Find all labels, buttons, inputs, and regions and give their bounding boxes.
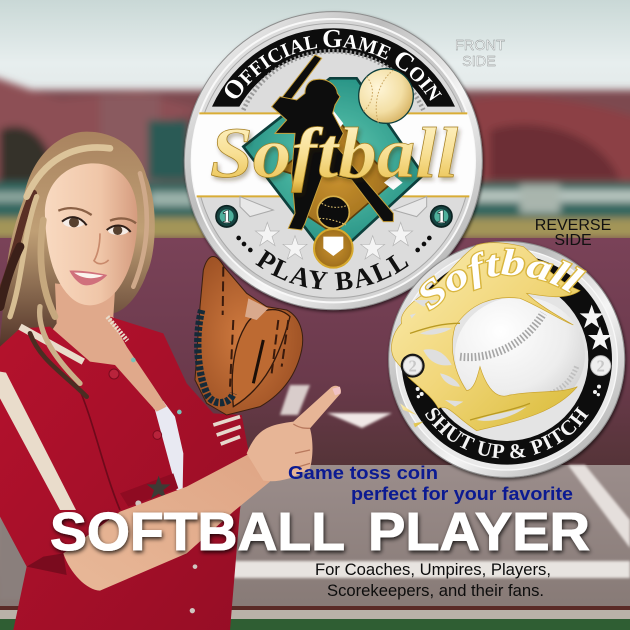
inner silver field [425, 278, 588, 441]
number badges [216, 206, 452, 227]
softball arc text on reverse [430, 275, 584, 312]
black top band [212, 28, 455, 107]
white center band [192, 113, 475, 197]
reverse side label: REVERSE [535, 217, 611, 234]
softball player title: SOFTBALL [50, 502, 345, 562]
hair strands over jersey [0, 147, 147, 397]
home plate [314, 229, 353, 268]
game toss tagline: Game toss coin [288, 462, 438, 483]
reverse coin [388, 240, 628, 482]
softball player title [50, 502, 590, 562]
softball script on front coin: Softball [210, 113, 458, 193]
stars and dots [236, 222, 432, 259]
official game coin arc text: OFFICIAL GAME COIN [224, 30, 442, 101]
buttons and star pin [109, 358, 197, 613]
red jersey [0, 317, 248, 630]
audience text: Scorekeepers, and their fans. [327, 581, 544, 600]
batter silhouette [272, 55, 393, 230]
audience text: For Coaches, Umpires, Players, [315, 560, 551, 579]
jersey sleeve and stripe [0, 372, 178, 575]
baseball [455, 297, 585, 413]
collar and cuff stripes [20, 317, 241, 444]
game toss tagline [288, 462, 573, 504]
gold flames [392, 243, 580, 431]
teal diamond [243, 78, 423, 243]
pitch ball icon [317, 196, 349, 228]
white undershirt [150, 400, 187, 493]
front side label: SIDE [462, 54, 496, 70]
facial features [58, 208, 136, 285]
face [45, 163, 137, 305]
black ring [401, 254, 612, 465]
number 2 badges: 2 [597, 357, 605, 376]
number 2 badges [401, 354, 611, 378]
softball player woman [0, 132, 341, 630]
stars and dots on reverse [416, 305, 612, 398]
number badges: 1 [437, 207, 446, 227]
front side label: FRONT [455, 38, 505, 54]
reverse coin: Softball [419, 248, 587, 312]
infield [280, 123, 393, 233]
silver lower panels [240, 197, 427, 217]
reverse side label [535, 217, 611, 249]
audience text [315, 560, 551, 600]
reverse side label: SIDE [554, 232, 592, 249]
shut up and pitch arc text: SHUT UP & PITCH [425, 406, 589, 458]
front coin [184, 12, 482, 310]
front side label [455, 38, 505, 70]
reverse coin rim [389, 241, 625, 477]
coin rim [184, 12, 482, 310]
forearm and pointing hand [63, 386, 341, 591]
neck and chest [50, 283, 167, 412]
play ball arc text: PLAY BALL [255, 249, 409, 290]
number badges: 1 [222, 207, 231, 227]
dashed frieze [243, 51, 423, 110]
softball player title: PLAYER [368, 502, 590, 562]
softball glove [195, 256, 303, 415]
hair back [0, 132, 155, 353]
softball icon upper right [359, 69, 413, 123]
game toss tagline: perfect for your favorite [351, 483, 573, 504]
gold band lines [197, 113, 469, 196]
number 2 badges: 2 [409, 357, 417, 376]
